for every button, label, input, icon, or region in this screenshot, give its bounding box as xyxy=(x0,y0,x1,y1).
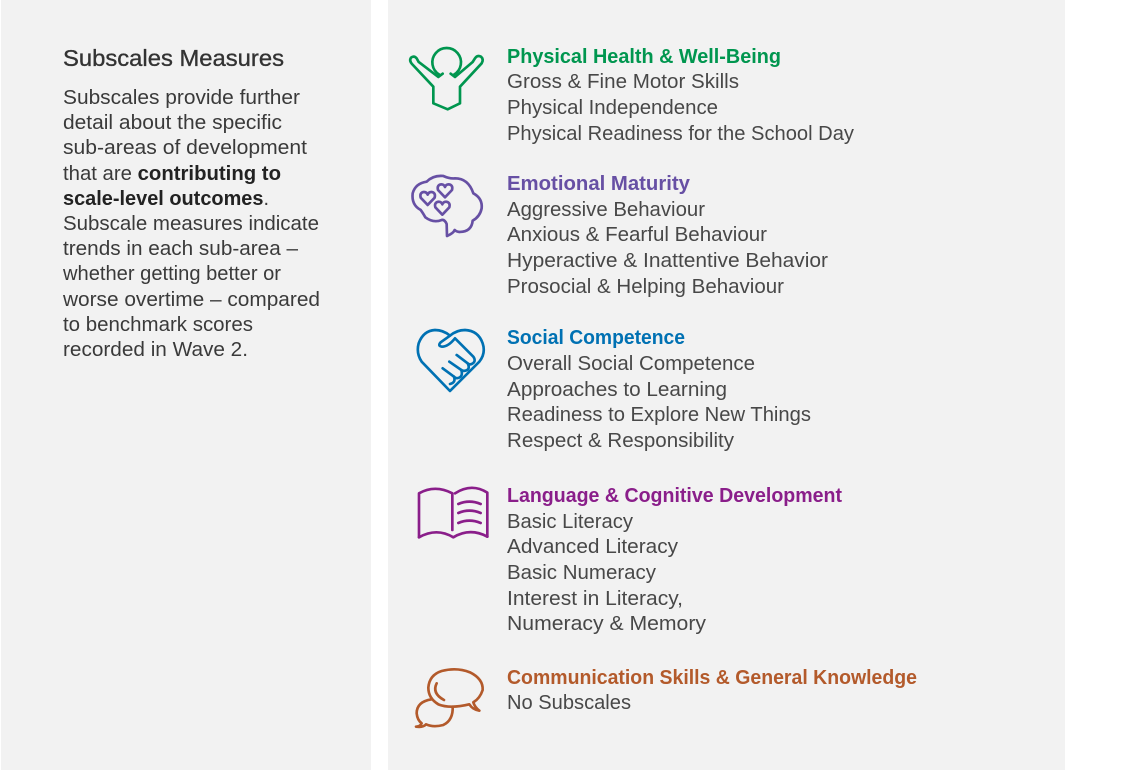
list: language subscales: Basic Literacy xyxy=(507,511,633,533)
text block: subscales description: worse overtime – compared xyxy=(62,289,320,311)
list: language subscales: Numeracy & Memory xyxy=(507,613,706,635)
list: emotional maturity subscales: Prosocial & Helping Behaviour xyxy=(507,276,784,298)
heading: Social Competence: Social Competence xyxy=(507,327,685,349)
list: language subscales: Advanced Literacy xyxy=(507,536,678,558)
text block: subscales description: that are contributing to xyxy=(63,163,281,185)
heading: Subscales Measures: Subscales Measures xyxy=(63,45,284,71)
list: emotional maturity subscales: Aggressive Behaviour xyxy=(507,199,705,221)
text block: subscales description: scale-level outcomes. xyxy=(63,188,269,210)
list: social competence subscales: Overall Social Competence xyxy=(507,353,755,375)
text block: subscales description: detail about the specific xyxy=(63,112,282,134)
list: physical health subscales: Physical Independence xyxy=(507,97,718,119)
panel: left background xyxy=(1,0,371,770)
heading: Physical Health & Well-Being: Physical Health & Well-Being xyxy=(507,46,781,68)
list: language subscales: Interest in Literacy, xyxy=(507,588,683,610)
panel: right background xyxy=(388,0,1065,770)
list: physical health subscales xyxy=(507,71,854,145)
list: social competence subscales: Approaches to Learning xyxy=(507,379,727,401)
icon: brain with hearts speech bubble xyxy=(412,176,482,236)
list: language subscales: Basic Numeracy xyxy=(507,562,656,584)
icon: speech bubbles xyxy=(416,669,483,727)
list: emotional maturity subscales: Anxious & Fearful Behaviour xyxy=(507,224,767,246)
list: social competence subscales: Readiness to Explore New Things xyxy=(507,404,811,426)
text block: subscales description: trends in each sub-area – xyxy=(63,238,299,260)
icon: open book xyxy=(419,488,487,537)
text block: subscales description: sub-areas of development xyxy=(63,137,307,159)
text block: subscales description: recorded in Wave 2. xyxy=(63,339,248,361)
list: language subscales xyxy=(507,511,706,635)
text block: subscales description: to benchmark scores xyxy=(63,314,253,336)
heading: Language & Cognitive Development: Language & Cognitive Development xyxy=(507,485,842,507)
list: emotional maturity subscales xyxy=(507,199,828,298)
heading: Communication Skills & General Knowledge: Communication Skills & General Knowledge xyxy=(507,667,917,689)
text: no subscales: No Subscales xyxy=(507,692,631,714)
list: emotional maturity subscales: Hyperactive & Inattentive Behavior xyxy=(507,250,828,272)
text block: subscales description: Subscale measures indicate xyxy=(63,213,319,235)
text block: subscales description: Subscales provide further xyxy=(63,87,300,109)
list: physical health subscales: Gross & Fine Motor Skills xyxy=(507,71,739,93)
list: social competence subscales xyxy=(507,353,811,452)
list: physical health subscales: Physical Readiness for the School Day xyxy=(507,123,854,145)
text block: subscales description: whether getting better or xyxy=(62,263,281,285)
icon: handshake heart xyxy=(418,330,484,391)
text block: subscales description xyxy=(62,87,320,361)
heading: Emotional Maturity: Emotional Maturity xyxy=(507,173,691,195)
icon: person with raised arms xyxy=(410,48,483,109)
list: social competence subscales: Respect & Responsibility xyxy=(507,430,734,452)
